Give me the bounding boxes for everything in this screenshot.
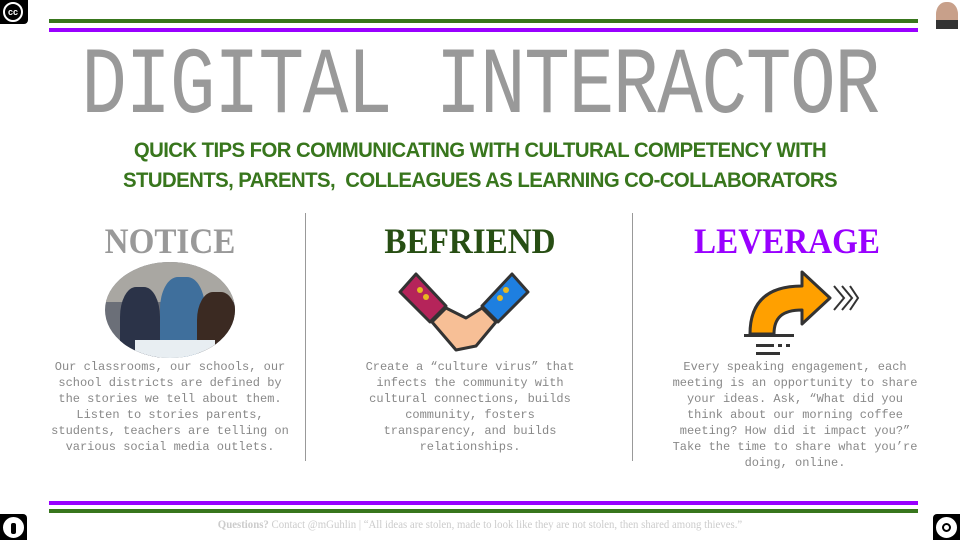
icon: handshake — [398, 272, 530, 352]
title: DIGITAL INTERACTOR — [81, 33, 879, 141]
text: notice: students, teachers are telling on — [51, 424, 289, 438]
text: notice: Our classrooms, our schools, our — [55, 360, 285, 374]
icon: author avatar — [936, 2, 958, 29]
text: leverage — [673, 360, 917, 470]
text: notice: Listen to stories parents, — [76, 408, 264, 422]
icon: arrow — [744, 270, 860, 355]
text: befriend — [366, 360, 574, 454]
text: notice: various social media outlets. — [66, 440, 274, 454]
text: befriend: community, fosters — [405, 408, 535, 422]
divider lines — [305, 213, 306, 461]
text: leverage: your ideas. Ask, “What did you — [687, 392, 903, 406]
photo: people — [105, 262, 235, 358]
footer: Questions? Contact @mGuhlin | “All ideas are stolen, made to look like they are not stolen, then shared among thieves.” — [218, 517, 742, 531]
text: befriend: relationships. — [420, 440, 520, 454]
icon: share alike — [933, 514, 960, 540]
heading: leverage: LEVERAGE — [694, 221, 880, 261]
text: befriend: transparency, and builds — [384, 424, 556, 438]
text: notice: the stories we tell about them. — [58, 392, 282, 406]
subtitle: QUICK TIPS FOR COMMUNICATING WITH CULTURAL COMPETENCY WITH — [134, 139, 826, 162]
heading: notice: NOTICE — [105, 221, 235, 261]
heading: befriend: BEFRIEND — [384, 221, 556, 261]
top lines — [49, 19, 918, 32]
bottom lines — [49, 501, 918, 513]
icon: cc license — [0, 0, 28, 24]
text: leverage: think about our morning coffee — [687, 408, 903, 422]
text: notice: school districts are defined by — [58, 376, 282, 390]
icon: attribution — [0, 514, 27, 540]
text: befriend: cultural connections, builds — [369, 392, 571, 406]
text: befriend: Create a “culture virus” that — [366, 360, 574, 374]
icon: cc license: cc — [8, 7, 18, 17]
text: leverage: doing, online. — [745, 456, 845, 470]
text: leverage: Every speaking engagement, each — [683, 360, 907, 374]
subtitle: STUDENTS, PARENTS, COLLEAGUES AS LEARNING CO-COLLABORATORS — [123, 169, 837, 192]
text: leverage: Take the time to share what you’re — [673, 440, 917, 454]
text: notice — [51, 360, 289, 454]
text: leverage: meeting? How did it impact you?” — [680, 424, 910, 438]
text: befriend: infects the community with — [376, 376, 564, 390]
text: leverage: meeting is an opportunity to share — [673, 376, 917, 390]
subtitle — [123, 139, 837, 192]
